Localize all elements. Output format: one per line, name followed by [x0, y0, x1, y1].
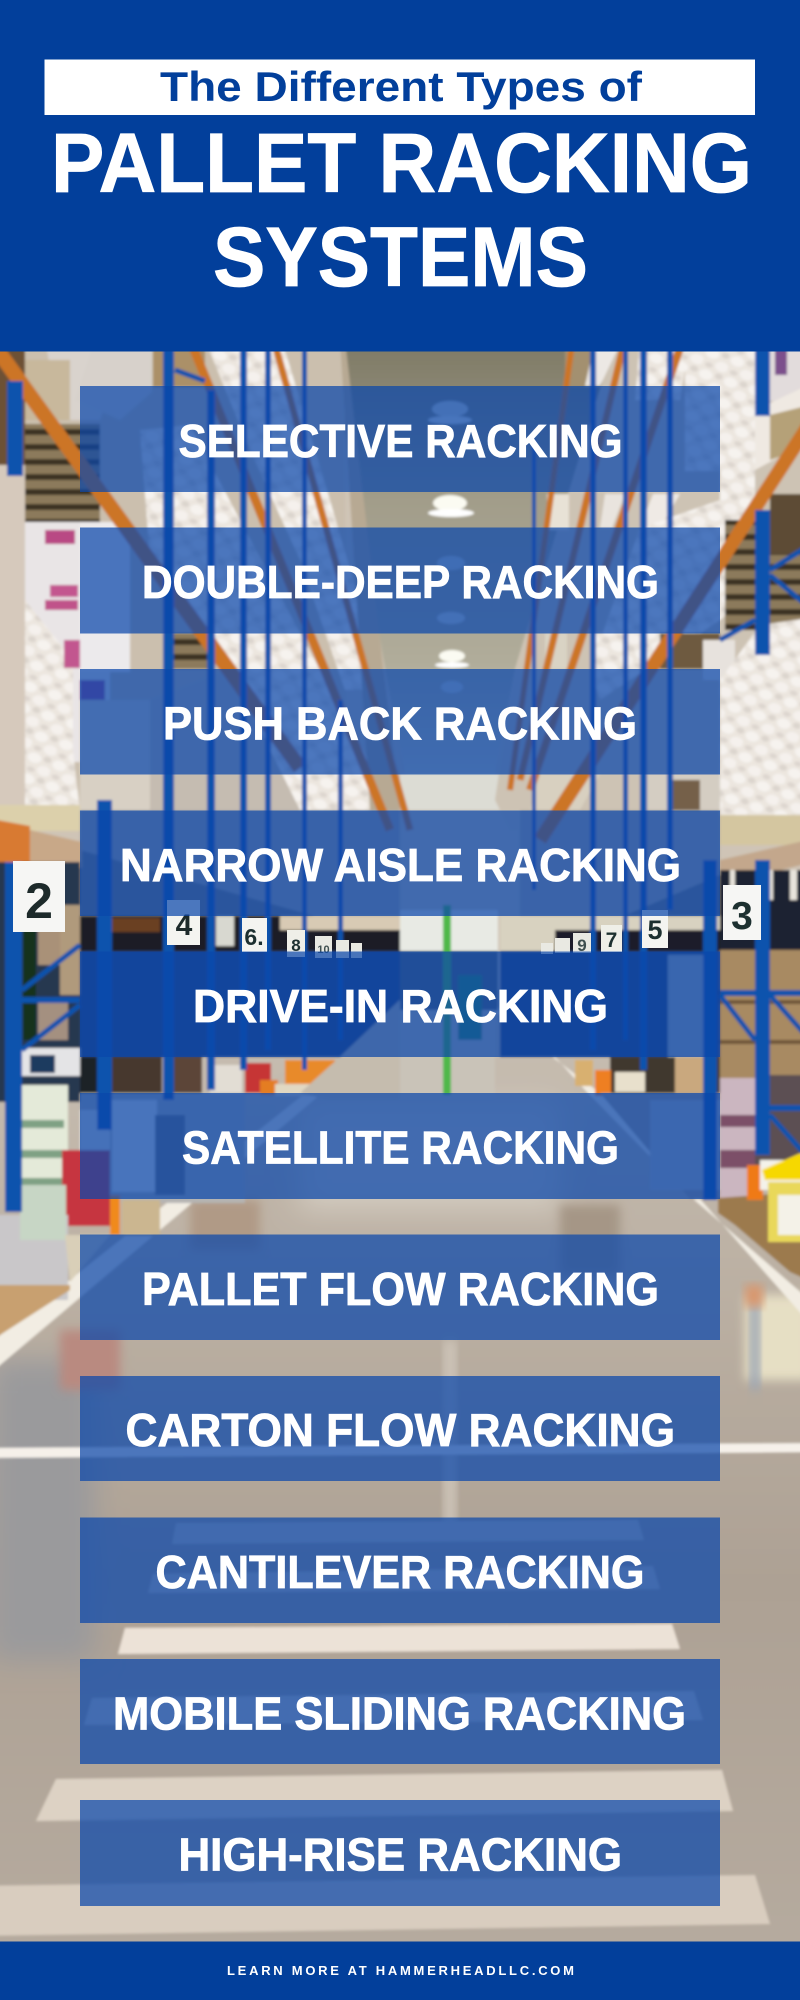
title: PALLET RACKING — [51, 116, 752, 210]
floor stripes — [0, 1520, 770, 1936]
ceiling — [345, 352, 602, 669]
left rack masses — [0, 340, 400, 960]
ceiling lamps — [426, 400, 476, 692]
bar: high-rise racking: HIGH-RISE RACKING — [178, 1828, 622, 1880]
left lower rack — [0, 862, 400, 1102]
aisle number signs: 2 — [25, 873, 53, 929]
footer band: LEARN MORE AT HAMMERHEADLLC.COM — [227, 1963, 574, 1978]
subtitle box: The Different Types of — [160, 63, 643, 110]
title: SYSTEMS — [213, 210, 588, 304]
subtitle box — [44, 60, 755, 115]
floor — [0, 1000, 800, 1970]
bar: mobile sliding racking: MOBILE SLIDING RACKING — [113, 1688, 686, 1740]
bar: high-rise racking — [80, 1800, 720, 1906]
bar: satellite racking: SATELLITE RACKING — [182, 1122, 619, 1174]
aisle number signs: 7 — [606, 929, 617, 952]
bar: narrow aisle racking: NARROW AISLE RACKING — [120, 839, 681, 891]
right lower rack — [500, 870, 800, 1290]
floor line: right edge — [496, 1008, 800, 1314]
bar: push back racking: PUSH BACK RACKING — [163, 698, 637, 750]
aisle number signs: 10 — [317, 944, 330, 956]
blue rack uprights — [5, 340, 770, 1212]
orange beams — [0, 330, 800, 840]
aisle number signs — [13, 861, 761, 958]
bar: double-deep racking — [80, 528, 720, 634]
bar: pallet flow racking — [80, 1234, 720, 1340]
footer band — [0, 1942, 800, 2000]
blue rack braces — [22, 370, 800, 1160]
aisle number signs: 5 — [647, 915, 663, 945]
aisle number signs: 6. — [244, 924, 264, 950]
bar: drive-in racking — [80, 952, 720, 1057]
left goods at floor — [0, 1085, 245, 1350]
right rack masses — [494, 352, 800, 918]
bar: double-deep racking: DOUBLE-DEEP RACKING — [142, 556, 659, 608]
bar: selective racking — [80, 386, 720, 492]
bar: selective racking: SELECTIVE RACKING — [178, 415, 622, 467]
end wall — [400, 774, 500, 1100]
title — [51, 116, 752, 304]
aisle number signs: 8 — [291, 936, 301, 955]
bar: satellite racking — [80, 1093, 720, 1199]
bar: pallet flow racking: PALLET FLOW RACKING — [142, 1263, 659, 1315]
aisle number signs: 3 — [731, 895, 753, 938]
bar: carton flow racking: CARTON FLOW RACKING — [126, 1404, 675, 1456]
bar: drive-in racking: DRIVE-IN RACKING — [193, 980, 608, 1032]
bar: cantilever racking: CANTILEVER RACKING — [156, 1546, 644, 1598]
header band — [0, 0, 800, 352]
aisle number signs: 9 — [577, 936, 587, 955]
floor line: left edge — [0, 1096, 315, 1367]
floor line: horizontal — [0, 1443, 800, 1458]
aisle number signs: 4 — [176, 909, 193, 942]
bar: narrow aisle racking — [80, 810, 720, 916]
bar: push back racking — [80, 669, 720, 774]
bar: carton flow racking — [80, 1376, 720, 1481]
bar: mobile sliding racking — [80, 1659, 720, 1764]
bar: cantilever racking — [80, 1518, 720, 1623]
